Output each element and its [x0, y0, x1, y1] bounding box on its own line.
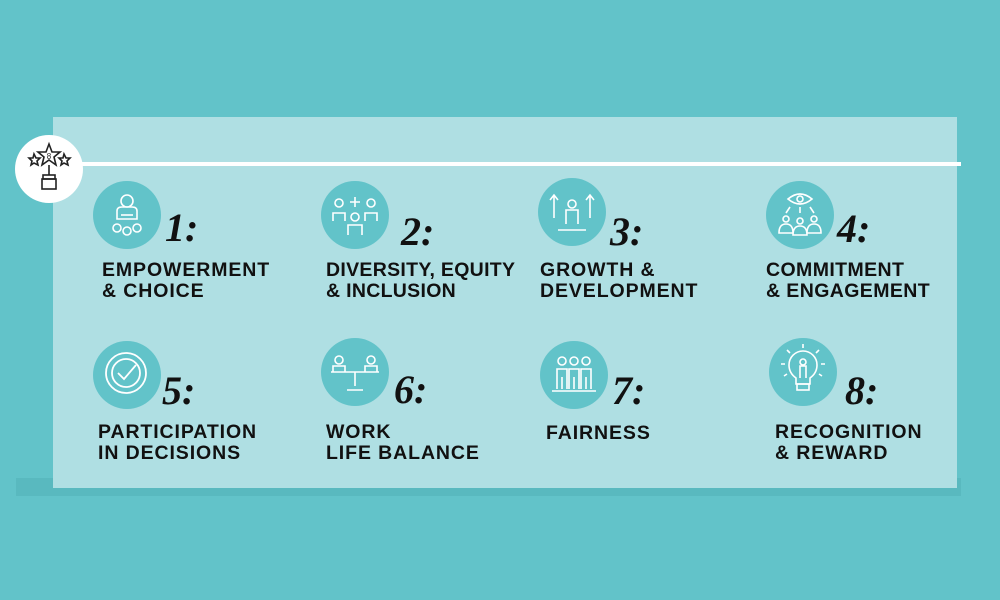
- icon: participation: [93, 341, 161, 409]
- number: 4:: [837, 206, 870, 251]
- label: IN DECISIONS: [98, 442, 241, 464]
- label: [775, 421, 922, 464]
- number: 5:: [162, 368, 195, 413]
- item 3: [538, 178, 698, 302]
- item 1: [93, 181, 270, 302]
- label: PARTICIPATION: [98, 421, 257, 443]
- label: [540, 259, 698, 302]
- label: & REWARD: [775, 442, 888, 464]
- label: WORK: [326, 421, 391, 443]
- label: [766, 259, 930, 302]
- item 5: [93, 341, 257, 464]
- label: COMMITMENT: [766, 259, 904, 281]
- label: [326, 259, 515, 302]
- main panel: [53, 117, 957, 488]
- label: DEVELOPMENT: [540, 280, 698, 302]
- label: [98, 421, 257, 464]
- icon: commitment: [766, 181, 834, 249]
- item 7: [540, 341, 651, 444]
- label: FAIRNESS: [546, 422, 651, 444]
- label: RECOGNITION: [775, 421, 922, 443]
- label: EMPOWERMENT: [102, 259, 270, 281]
- label: & CHOICE: [102, 280, 205, 302]
- item 4: [766, 181, 930, 302]
- label: [326, 421, 480, 464]
- item 8: [769, 338, 922, 464]
- icon: trophy: [15, 135, 83, 203]
- item 2: [321, 181, 515, 302]
- number: 6:: [394, 367, 427, 412]
- item 6: [321, 338, 480, 464]
- icon: fairness: [540, 341, 608, 409]
- label: DIVERSITY, EQUITY: [326, 259, 515, 281]
- icon: empowerment: [93, 181, 161, 249]
- number: 2:: [401, 209, 434, 254]
- label: LIFE BALANCE: [326, 442, 480, 464]
- label: [102, 259, 270, 302]
- shadow strip: [16, 478, 961, 496]
- icon: work life balance: [321, 338, 389, 406]
- label: & ENGAGEMENT: [766, 280, 930, 302]
- divider line: [70, 162, 961, 166]
- number: 7:: [612, 368, 645, 413]
- icon: growth: [538, 178, 606, 246]
- label: GROWTH &: [540, 259, 656, 281]
- number: 1:: [165, 205, 198, 250]
- icon: trophy: 8: [47, 152, 52, 161]
- number: 3:: [610, 209, 643, 254]
- number: 8:: [845, 368, 878, 413]
- icon: recognition: [769, 338, 837, 406]
- label: & INCLUSION: [326, 280, 456, 302]
- icon: diversity: [321, 181, 389, 249]
